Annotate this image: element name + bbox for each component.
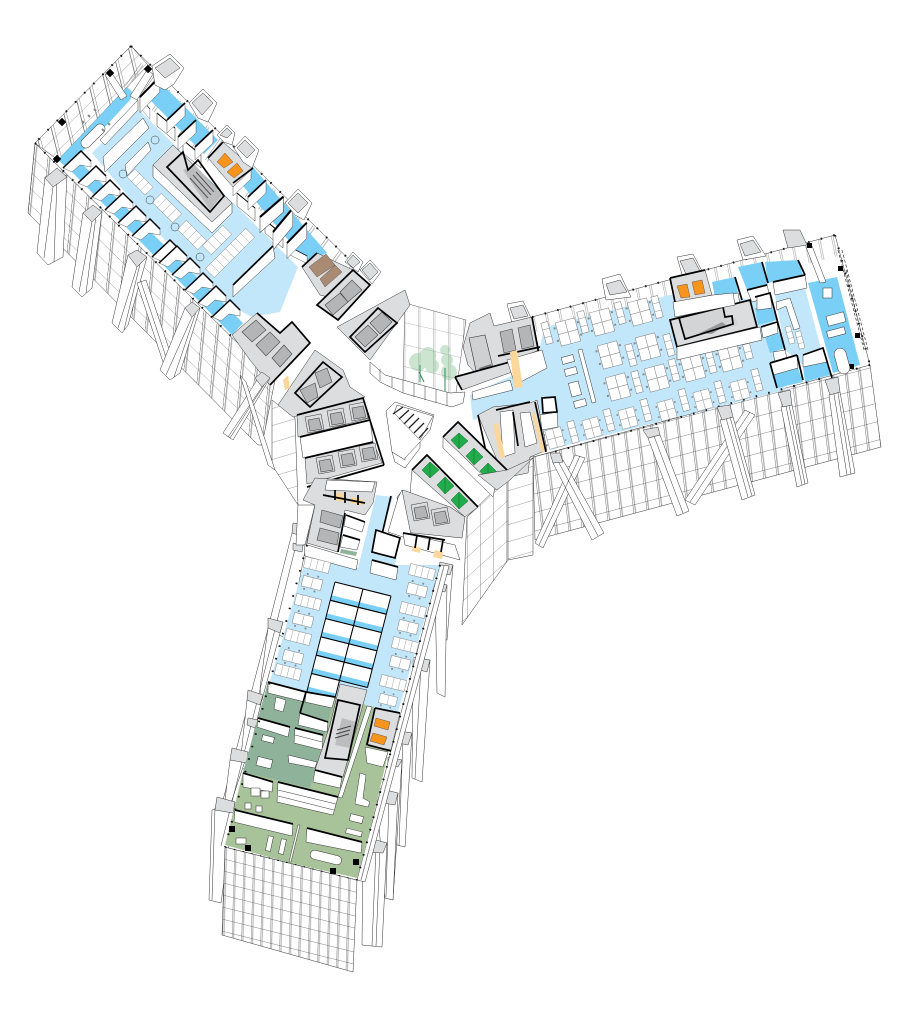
trunks	[419, 365, 445, 391]
south floor: light blue	[270, 495, 440, 712]
west floor: upper blue band 1	[146, 82, 218, 154]
facade: inner corner southeast	[462, 477, 508, 625]
brown room	[302, 253, 353, 300]
west wing edges	[35, 46, 363, 337]
south green furniture	[236, 735, 364, 866]
west long partition	[233, 246, 275, 297]
east wing edges	[532, 235, 870, 453]
west desks	[103, 118, 255, 278]
facade: west wing	[28, 143, 275, 445]
east floor: end blue	[808, 277, 860, 373]
facade: southeast vertical band	[508, 455, 533, 560]
south wing left piers	[209, 523, 310, 903]
east north caps	[507, 230, 807, 323]
east grey core	[670, 300, 762, 360]
core by atrium	[455, 313, 547, 400]
east blue cells	[712, 260, 830, 388]
east black columns	[807, 243, 860, 369]
west end diagonal bars	[105, 70, 153, 100]
facade: southwest sliver	[296, 505, 315, 545]
conference table west	[79, 109, 110, 150]
south wing partition top left	[304, 544, 358, 570]
orange room west	[208, 142, 253, 187]
facade: south end	[222, 847, 357, 972]
facade: east wing	[533, 365, 881, 540]
orange room south	[366, 708, 400, 751]
core block with lifts: west	[232, 313, 365, 417]
south floor: green	[225, 682, 392, 878]
west upper glazing mullions	[125, 62, 363, 290]
west black columns	[53, 65, 152, 163]
south wing right piers	[357, 562, 453, 947]
green planter blocks	[410, 422, 533, 517]
central stair	[386, 402, 434, 468]
west floor: light blue	[92, 108, 298, 317]
west floor: upper blue band 2	[238, 166, 327, 262]
core block with lifts: north	[317, 270, 410, 360]
east upper glazing mullions	[532, 235, 838, 332]
west long panel	[100, 100, 138, 145]
west walls upper row	[140, 77, 307, 259]
facade: inner corner southwest	[272, 400, 298, 505]
south wing edges	[225, 545, 440, 880]
east end strip	[806, 246, 868, 350]
south stair core	[315, 684, 372, 798]
east floor: light blue	[470, 295, 785, 450]
south black columns	[229, 826, 359, 874]
west central core	[153, 145, 232, 233]
east meeting room furniture	[776, 288, 851, 375]
west wing front piers	[37, 168, 275, 470]
east floor: light end	[775, 288, 827, 372]
east desks	[541, 295, 805, 450]
core with three lifts rows	[297, 398, 384, 487]
east partitions	[715, 260, 832, 388]
core right of south corridor	[370, 490, 465, 580]
service rooms south of corridor	[478, 397, 558, 477]
east wing front piers	[535, 377, 855, 548]
west walls lower row	[63, 151, 240, 321]
orange room east	[670, 270, 735, 317]
west floor: end blue room	[58, 87, 133, 168]
atrium glazing	[370, 303, 466, 407]
south floor: dark green	[243, 682, 335, 788]
west wing upper caps	[152, 54, 381, 284]
west upper corridor faces	[140, 97, 307, 264]
south central offices	[307, 582, 391, 699]
south wing: desks	[274, 556, 436, 710]
west end glazing	[35, 46, 148, 160]
south green zone walls	[234, 682, 388, 862]
trees	[409, 345, 457, 380]
west floor: outer blue band	[72, 163, 243, 335]
core above south wing	[303, 478, 377, 556]
